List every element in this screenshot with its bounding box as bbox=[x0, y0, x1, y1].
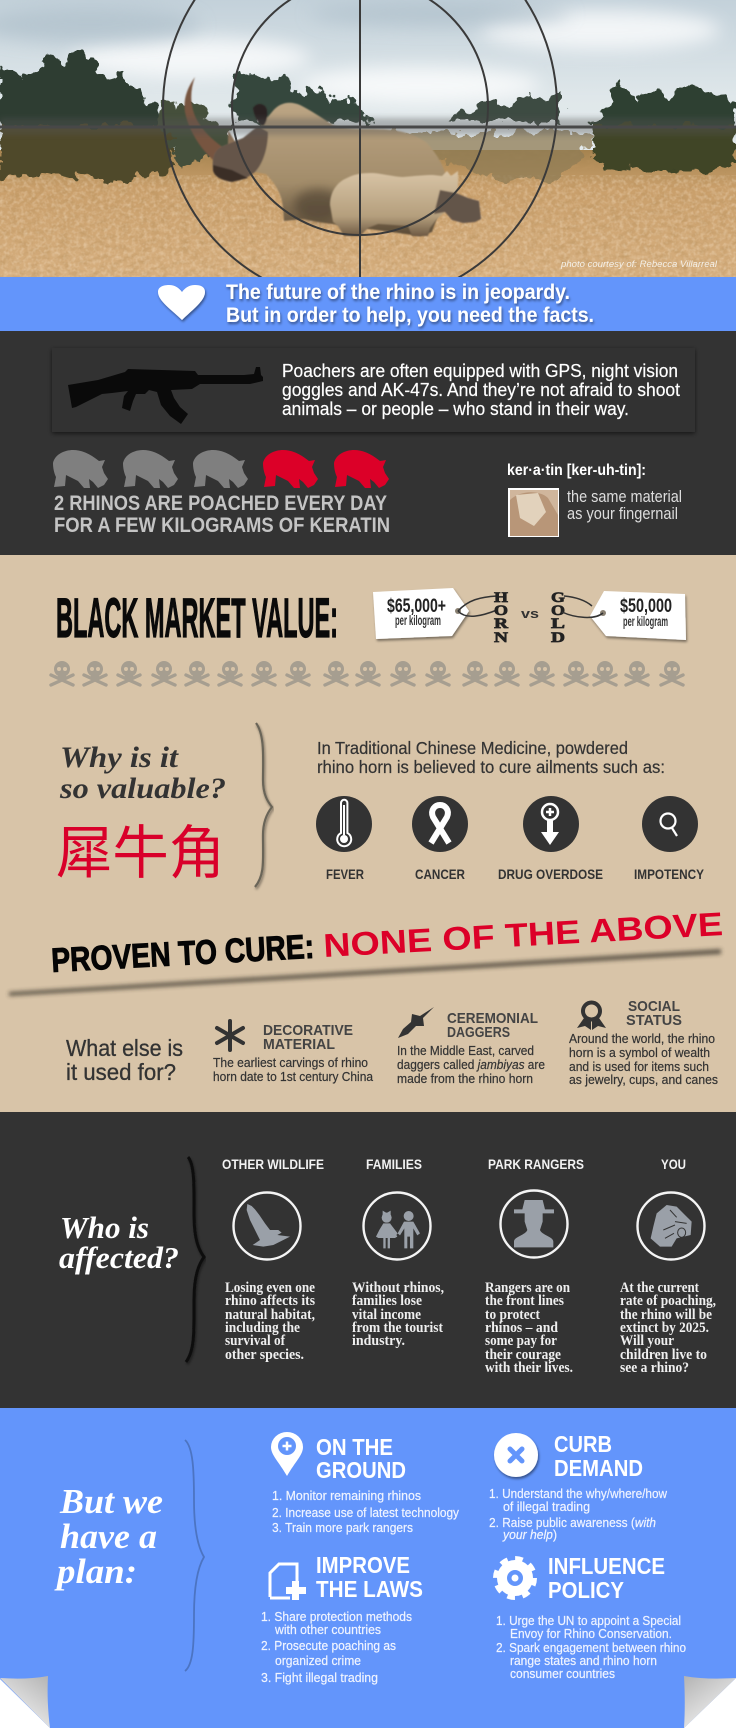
gun callout bbox=[52, 348, 695, 432]
plan: on the ground: 2. Increase use of latest technology bbox=[272, 1505, 459, 1520]
icon: ranger bbox=[500, 1190, 568, 1258]
brace bbox=[185, 1440, 204, 1671]
group headings: YOU bbox=[661, 1157, 686, 1172]
keratin definition: ker·a·tin [ker-uh-tin]: bbox=[507, 462, 646, 479]
icon: document plus bbox=[270, 1564, 306, 1600]
rangers text: Rangers are on bbox=[485, 1280, 570, 1296]
families text: from the tourist bbox=[352, 1320, 443, 1336]
heading: but we have a plan bbox=[54, 1482, 163, 1591]
plan: improve the laws: organized crime bbox=[275, 1653, 361, 1668]
rhino count icons bbox=[53, 450, 389, 488]
intro text bbox=[226, 281, 594, 327]
plan: improve the laws bbox=[261, 1552, 423, 1685]
plan: influence policy: POLICY bbox=[548, 1577, 624, 1603]
families text: vital income bbox=[352, 1307, 422, 1323]
medicine text bbox=[317, 738, 665, 777]
icon: pointing fist bbox=[638, 1192, 704, 1260]
tag: horn price: per kilogram bbox=[395, 612, 441, 628]
plan: on the ground: ON THE bbox=[316, 1434, 393, 1460]
scope reticle bbox=[0, 0, 736, 304]
you text: extinct by 2025. bbox=[620, 1320, 709, 1336]
icon: asterisk bbox=[217, 1021, 243, 1050]
plan: curb demand: 2. Raise public awareness (with bbox=[489, 1515, 656, 1530]
mother rhino bbox=[184, 77, 447, 236]
icon: ribbon medal bbox=[577, 1002, 606, 1030]
word: GOLD: L bbox=[551, 616, 565, 632]
wildlife text: natural habitat, bbox=[225, 1307, 315, 1323]
group headings: PARK RANGERS bbox=[488, 1157, 584, 1172]
heading: what else: What else is bbox=[66, 1035, 183, 1061]
poachers text: goggles and AK-47s. And they’re not afraid to shoot bbox=[282, 379, 680, 400]
use: ceremonial daggers bbox=[397, 1007, 545, 1086]
panel: black market and uses bbox=[0, 555, 736, 1112]
heading: why is it so valuable: so valuable? bbox=[59, 772, 226, 805]
word: HORN bbox=[494, 590, 508, 646]
poaching stat: FOR A FEW KILOGRAMS OF KERATIN bbox=[54, 514, 390, 537]
plan: influence policy: 1. Urge the UN to appoint a Special bbox=[496, 1613, 681, 1628]
ailment labels bbox=[326, 866, 705, 882]
word: HORN: R bbox=[494, 616, 508, 632]
use: social status bbox=[569, 998, 718, 1087]
poachers text bbox=[282, 360, 680, 419]
plan: influence policy bbox=[496, 1553, 686, 1681]
plan: curb demand: DEMAND bbox=[554, 1455, 643, 1481]
you text: Will your bbox=[620, 1333, 675, 1349]
icon: children bbox=[364, 1192, 430, 1260]
group headings: OTHER WILDLIFE bbox=[222, 1157, 324, 1172]
rangers text: rhinos – and bbox=[485, 1320, 558, 1336]
intro text: The future of the rhino is in jeopardy. bbox=[226, 281, 570, 304]
wildlife text: other species. bbox=[225, 1347, 304, 1363]
icon: cancer ribbon bbox=[412, 796, 468, 852]
icon: heart bbox=[158, 285, 205, 320]
poaching stat: 2 RHINOS ARE POACHED EVERY DAY bbox=[54, 492, 387, 515]
use: ceremonial daggers: In the Middle East, carved bbox=[397, 1043, 534, 1058]
plan: improve the laws: with other countries bbox=[274, 1622, 381, 1637]
ailment labels: DRUG OVERDOSE bbox=[498, 866, 603, 882]
plan: curb demand: CURB bbox=[554, 1431, 612, 1457]
heading: but we have a plan: plan: bbox=[54, 1552, 137, 1591]
poachers text: Poachers are often equipped with GPS, night vision bbox=[282, 360, 678, 381]
heading: who is affected bbox=[59, 1210, 179, 1275]
skull row bbox=[51, 661, 683, 685]
ailment labels: IMPOTENCY bbox=[634, 866, 705, 882]
keratin definition: as your fingernail bbox=[567, 505, 678, 523]
brace bbox=[255, 723, 272, 887]
hero photo with rifle scope bbox=[0, 0, 736, 304]
rangers text: their courage bbox=[485, 1347, 562, 1363]
ailment labels: CANCER bbox=[415, 866, 465, 882]
use: decorative material bbox=[213, 1021, 374, 1084]
photo credit: photo courtesy of: Rebecca Villarreal bbox=[560, 259, 718, 269]
plan: curb demand bbox=[489, 1431, 668, 1542]
proven label: PROVEN TO CURE: bbox=[50, 928, 315, 980]
plan: on the ground: 1. Monitor remaining rhinos bbox=[272, 1488, 421, 1503]
plan: on the ground: 3. Train more park rangers bbox=[272, 1520, 413, 1535]
icon: drug overdose bbox=[523, 796, 579, 852]
ailment labels: FEVER bbox=[326, 866, 364, 882]
word: HORN: O bbox=[494, 603, 508, 619]
plan: influence policy: Envoy for Rhino Conservation. bbox=[510, 1626, 672, 1641]
panel: who is affected bbox=[0, 1112, 736, 1408]
medicine text: In Traditional Chinese Medicine, powdered bbox=[317, 738, 628, 758]
page curl: right bbox=[684, 1676, 736, 1728]
heading: what else bbox=[66, 1035, 183, 1085]
wildlife text bbox=[225, 1280, 316, 1363]
icon: impotency bbox=[642, 796, 698, 852]
use: decorative material: DECORATIVE bbox=[263, 1022, 353, 1039]
use: social status: SOCIAL bbox=[628, 998, 680, 1015]
word: GOLD: O bbox=[551, 603, 565, 619]
tag: gold price: per kilogram bbox=[623, 613, 668, 629]
panel: black market and uses: BLACK MARKET VALUE: bbox=[56, 586, 338, 649]
tag: horn price bbox=[373, 588, 497, 639]
icon: fever bbox=[316, 796, 372, 852]
plan: on the ground bbox=[271, 1432, 459, 1535]
word: GOLD: G bbox=[551, 590, 565, 606]
use: social status: horn is a symbol of wealth bbox=[569, 1045, 710, 1060]
heading: why is it so valuable: Why is it bbox=[60, 741, 180, 774]
plan: improve the laws: 2. Prosecute poaching as bbox=[261, 1638, 396, 1653]
plan: influence policy: consumer countries bbox=[510, 1666, 615, 1681]
poachers text: animals – or people – who stand in their way. bbox=[282, 398, 629, 419]
families text: industry. bbox=[352, 1333, 405, 1349]
use: decorative material: The earliest carvings of rhino bbox=[213, 1055, 368, 1070]
you text: the rhino will be bbox=[620, 1307, 713, 1323]
plan: curb demand: 1. Understand the why/where/how bbox=[489, 1486, 668, 1501]
use: ceremonial daggers: made from the rhino horn bbox=[397, 1071, 533, 1086]
plan: improve the laws: IMPROVE bbox=[316, 1552, 410, 1578]
plan: improve the laws: THE LAWS bbox=[316, 1576, 423, 1602]
wildlife text: including the bbox=[225, 1320, 301, 1336]
heading: why is it so valuable bbox=[59, 741, 226, 805]
icon: eagle bbox=[234, 1192, 300, 1260]
icon: dagger bbox=[398, 1007, 434, 1038]
tag: gold price bbox=[562, 591, 686, 640]
panel: the plan bbox=[0, 1408, 736, 1728]
plan: influence policy: 2. Spark engagement between rhino bbox=[496, 1640, 686, 1655]
chinese rhino horn: 犀牛角 bbox=[56, 821, 225, 886]
tag: horn price: $65,000+ bbox=[387, 596, 446, 617]
you text: At the current bbox=[620, 1280, 699, 1296]
use: ceremonial daggers: daggers called jambiyas are bbox=[397, 1057, 545, 1072]
versus: vs bbox=[521, 606, 539, 621]
plan: on the ground: GROUND bbox=[316, 1457, 406, 1483]
use: decorative material: MATERIAL bbox=[263, 1036, 335, 1053]
page curl: left bbox=[0, 1676, 50, 1728]
icon: map pin bbox=[271, 1432, 303, 1476]
word: GOLD bbox=[551, 590, 565, 646]
use: social status: Around the world, the rhino bbox=[569, 1031, 715, 1046]
brace bbox=[186, 1157, 204, 1362]
plan: curb demand: of illegal trading bbox=[503, 1499, 590, 1514]
medicine text: rhino horn is believed to cure ailments such as: bbox=[317, 757, 665, 777]
rangers text: the front lines bbox=[485, 1293, 564, 1309]
plan: improve the laws: 1. Share protection methods bbox=[261, 1609, 412, 1624]
rangers text: some pay for bbox=[485, 1333, 557, 1349]
plan: improve the laws: 3. Fight illegal trading bbox=[261, 1670, 378, 1685]
panel: poachers bbox=[0, 331, 736, 555]
families text: Without rhinos, bbox=[352, 1280, 444, 1296]
rangers text: with their lives. bbox=[485, 1360, 573, 1376]
poaching stat bbox=[54, 492, 390, 537]
group headings: FAMILIES bbox=[366, 1157, 422, 1172]
heading: who is affected: affected? bbox=[59, 1240, 179, 1275]
you text: see a rhino? bbox=[620, 1360, 689, 1376]
heading: but we have a plan: But we bbox=[59, 1482, 163, 1521]
none of the above: NONE OF THE ABOVE bbox=[322, 905, 724, 964]
word: HORN: H bbox=[494, 590, 508, 606]
you text: rate of poaching, bbox=[620, 1293, 716, 1309]
tag: gold price: $50,000 bbox=[620, 596, 672, 617]
heading: but we have a plan: have a bbox=[60, 1517, 157, 1556]
icon: gear bbox=[496, 1559, 534, 1597]
wildlife text: rhino affects its bbox=[225, 1293, 315, 1309]
word: GOLD: D bbox=[551, 630, 565, 646]
use: social status: STATUS bbox=[626, 1012, 682, 1029]
intro text: But in order to help, you need the facts. bbox=[226, 304, 594, 327]
use: ceremonial daggers: CEREMONIAL bbox=[447, 1010, 538, 1027]
use: decorative material: horn date to 1st century China bbox=[213, 1069, 374, 1084]
icon: x in circle bbox=[494, 1433, 538, 1477]
wildlife text: survival of bbox=[225, 1333, 285, 1349]
proven to cure banner bbox=[9, 905, 724, 996]
plan: influence policy: INFLUENCE bbox=[548, 1553, 665, 1579]
keratin definition: the same material bbox=[567, 488, 682, 506]
intro band bbox=[0, 277, 736, 331]
families text: families lose bbox=[352, 1293, 423, 1309]
fingernail photo bbox=[508, 488, 559, 537]
use: ceremonial daggers: DAGGERS bbox=[447, 1024, 510, 1041]
use: social status: as jewelry, cups, and canes bbox=[569, 1072, 718, 1087]
rangers text bbox=[485, 1280, 573, 1376]
heading: who is affected: Who is bbox=[60, 1210, 149, 1245]
baby rhino bbox=[330, 171, 481, 236]
you text bbox=[620, 1280, 716, 1376]
rangers text: to protect bbox=[485, 1307, 540, 1323]
families text bbox=[352, 1280, 444, 1349]
wildlife text: Losing even one bbox=[225, 1280, 316, 1296]
plan: influence policy: range states and rhino horn bbox=[510, 1653, 657, 1668]
you text: children live to bbox=[620, 1347, 707, 1363]
keratin definition bbox=[507, 462, 682, 537]
plan: curb demand: your help) bbox=[502, 1527, 557, 1542]
use: social status: and is used for items such bbox=[569, 1059, 709, 1074]
heading: what else: it used for? bbox=[66, 1059, 176, 1085]
group headings bbox=[222, 1157, 686, 1172]
icon: AK-47 bbox=[68, 367, 263, 424]
word: HORN: N bbox=[494, 630, 508, 646]
